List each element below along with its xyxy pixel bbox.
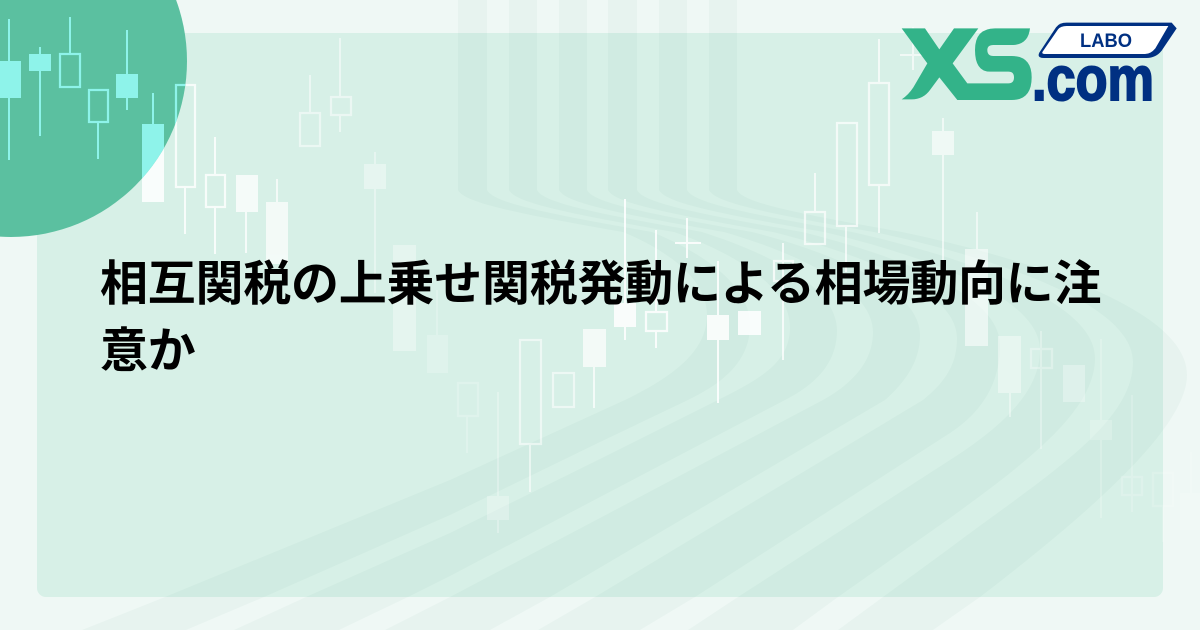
logo text: .com: .com (1032, 45, 1154, 114)
title: 意か (100, 325, 196, 378)
logo badge: LABO: LABO (1080, 31, 1132, 52)
title (100, 258, 1101, 378)
candlestick chart: white candles (142, 27, 1200, 542)
candlestick chart: cyan candles inside circle (0, 17, 186, 178)
logo badge: LABO (1039, 23, 1177, 58)
title: 相互関税の上乗せ関税発動による相場動向に注 (100, 258, 1101, 311)
corner circle (0, 0, 187, 237)
logo: XS.com LABO (902, 23, 1177, 114)
logo mark: XS (902, 28, 1032, 100)
